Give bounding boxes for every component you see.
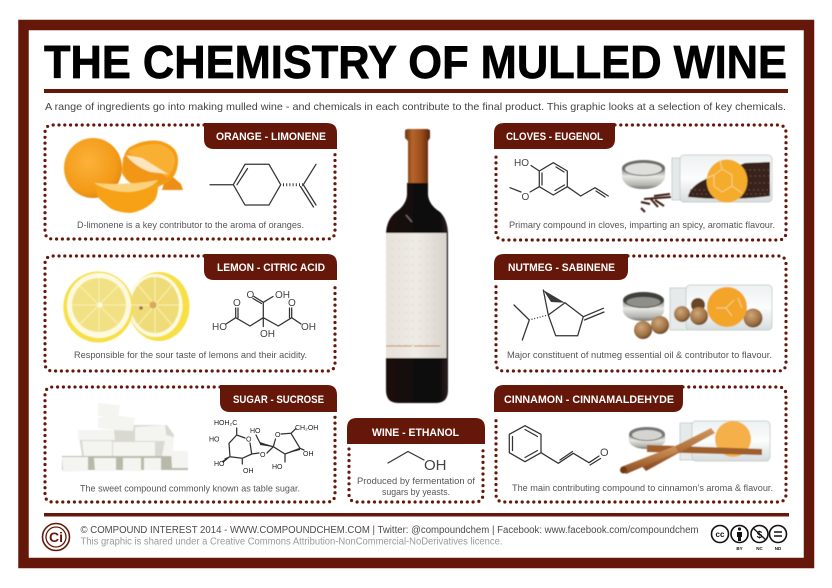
- structure: citric acid: O: [246, 290, 254, 301]
- structure: cinnamaldehyde: [509, 426, 609, 465]
- caption: nutmeg: Major constituent of nutmeg essential oil & contributor to flavour.: [507, 350, 772, 361]
- photo: lemons: [63, 272, 190, 342]
- heading tab: nutmeg: [494, 254, 628, 280]
- panel: nutmeg sabinene: [494, 254, 786, 371]
- photo: nutmeg jar: [623, 285, 772, 339]
- photo: clove jar: [622, 155, 772, 212]
- caption: lemon: Responsible for the sour taste of lemons and their acidity.: [74, 350, 307, 361]
- structure: sucrose: HO: [250, 428, 261, 435]
- heading tab: cloves: [494, 123, 615, 149]
- caption: cinnamon: The main contributing compound to cinnamon’s aroma & flavour.: [512, 483, 773, 494]
- panel: sugar sucrose: [45, 385, 337, 502]
- logo: compound interest: [42, 524, 70, 550]
- heading tab: cloves: CLOVES - EUGENOL: [506, 131, 603, 143]
- title: THE CHEMISTRY OF MULLED WINE: [44, 36, 787, 88]
- structure: sucrose: HO: [272, 464, 283, 471]
- structure: ethanol: OH: [424, 457, 446, 474]
- licence icons: [712, 526, 786, 551]
- structure: eugenol: [510, 158, 608, 203]
- structure: sucrose: O: [246, 436, 252, 444]
- logo: compound interest: Ci: [49, 529, 63, 545]
- structure: citric acid: OH: [260, 329, 275, 340]
- heading tab: cinnamon: CINNAMON - CINNAMALDEHYDE: [504, 394, 674, 406]
- title rule: [44, 89, 788, 93]
- structure: sucrose: OH: [243, 468, 254, 475]
- photo: cinnamon jar: [620, 421, 770, 474]
- caption: wine: sugars by yeasts.: [382, 487, 450, 498]
- caption: cloves: Primary compound in cloves, imparting an spicy, aromatic flavour.: [509, 220, 775, 231]
- structure: sucrose: HOH₂C: [214, 420, 237, 427]
- caption: wine: Produced by fermentation of: [357, 476, 475, 487]
- structure: citric acid: HO: [212, 322, 227, 333]
- heading tab: lemon: [204, 254, 337, 280]
- footer licence: This graphic is shared under a Creative Commons Attribution-NonCommercial-NoDerivatives licence.: [80, 536, 502, 548]
- footer rule: [44, 513, 789, 516]
- structure: sabinene: [514, 290, 604, 340]
- licence icons: $: [757, 530, 763, 541]
- heading tab: nutmeg: NUTMEG - SABINENE: [508, 262, 615, 274]
- panel: cloves eugenol: [494, 123, 786, 240]
- panel: wine ethanol: [347, 418, 485, 502]
- photo: sugar cubes: [62, 403, 188, 472]
- heading tab: sugar: [220, 385, 337, 412]
- heading tab: orange: ORANGE - LIMONENE: [216, 131, 326, 143]
- heading tab: orange: [204, 123, 337, 149]
- structure: limonene: [210, 164, 316, 207]
- structure: sucrose: O: [275, 432, 281, 439]
- structure: sucrose: [209, 420, 318, 475]
- structure: sucrose: HO: [209, 436, 220, 444]
- caption: sugar: The sweet compound commonly known as table sugar.: [80, 484, 300, 494]
- licence icons: NC: [756, 546, 763, 551]
- structure: citric acid: [212, 290, 316, 340]
- licence icons: BY: [736, 546, 743, 551]
- structure: sucrose: HO: [214, 461, 225, 468]
- heading tab: cinnamon: [494, 385, 683, 412]
- caption: wine: [357, 476, 475, 498]
- licence icons: cc: [716, 530, 725, 539]
- photo: oranges: [64, 138, 183, 213]
- panel: orange limonene: [45, 123, 337, 239]
- structure: citric acid: OH: [301, 322, 316, 333]
- structure: sucrose: O: [260, 452, 266, 459]
- heading tab: wine: WINE - ETHANOL: [372, 427, 459, 439]
- structure: eugenol: HO: [514, 158, 529, 169]
- wine bottle: [386, 129, 448, 403]
- panel: lemon citric acid: [45, 254, 337, 371]
- heading tab: lemon: LEMON - CITRIC ACID: [217, 262, 325, 274]
- panel: cinnamon cinnamaldehyde: [494, 385, 786, 502]
- intro text: A range of ingredients go into making mulled wine - and chemicals in each contribute to the final product. This graphic looks at a selection of key chemicals.: [45, 101, 786, 113]
- structure: citric acid: OH: [275, 290, 290, 301]
- caption: orange: D-limonene is a key contributor to the aroma of oranges.: [77, 220, 304, 231]
- structure: citric acid: O: [288, 298, 296, 309]
- structure: cinnamaldehyde: O: [600, 447, 609, 459]
- structure: sucrose: CH₂OH: [295, 425, 318, 432]
- structure: eugenol: O: [522, 192, 530, 203]
- licence icons: ND: [775, 546, 782, 551]
- structure: citric acid: O: [233, 298, 241, 309]
- structure: sucrose: OH: [303, 451, 314, 458]
- heading tab: sugar: SUGAR - SUCROSE: [233, 394, 324, 406]
- footer credit: © COMPOUND INTEREST 2014 - WWW.COMPOUNDCHEM.COM | Twitter: @compoundchem | Facebook: www.facebook.com/compoundchem: [80, 525, 698, 536]
